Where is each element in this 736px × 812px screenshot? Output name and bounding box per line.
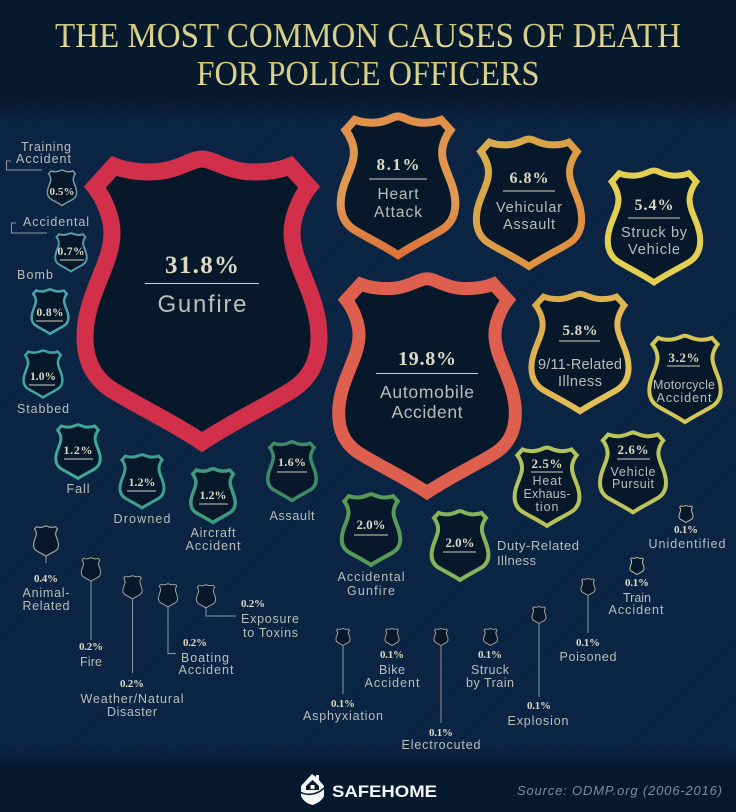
shield: struck by vehicle 5.4%: 5.4% (634, 197, 674, 214)
shield: exposure to toxins 0.2%: Exposure (241, 612, 299, 626)
shield: heart attack 8.1%: Attack (374, 204, 422, 221)
shield: stabbed 1.0%: 1.0% (30, 371, 56, 383)
shield: accidental gunfire 2.0% (338, 494, 404, 598)
shield: exposure to toxins 0.2%: to Toxins (243, 626, 298, 640)
shield: animal-related 0.4% (22, 526, 70, 613)
logo: SafeHome (300, 774, 437, 805)
shield: weather/natural disaster 0.2%: 0.2% (120, 678, 144, 690)
shield: explosion 0.1%: Explosion (508, 714, 569, 728)
shield: drowned 1.2%: 1.2% (128, 475, 156, 489)
shield: heart attack 8.1%: Heart (378, 186, 419, 203)
shield: vehicle pursuit 2.6%: Vehicle (610, 465, 656, 479)
shield: asphyxiation 0.1%: 0.1% (331, 698, 355, 710)
shield: training accident 0.5% (6, 140, 77, 206)
shield: asphyxiation 0.1%: Asphyxiation (303, 709, 383, 723)
shield: exposure to toxins 0.2% (196, 585, 299, 640)
shield: assault 1.6% (268, 442, 316, 523)
shield: animal-related 0.4%: Animal- (22, 586, 70, 600)
shield: train accident 0.1%: Train (623, 591, 651, 605)
shield: explosion 0.1% (508, 607, 569, 728)
shield: gunfire 31.8%: 31.8% (165, 252, 239, 279)
shield: unidentified 0.1%: Unidentified (648, 537, 726, 551)
shield: fire 0.2%: Fire (80, 655, 102, 669)
shield: aircraft accident 1.2% (186, 469, 241, 553)
shield: poisoned 0.1%: 0.1% (576, 637, 600, 649)
shield: exposure to toxins 0.2%: 0.2% (241, 598, 265, 610)
shield: heat exhaustion 2.5%: tion (536, 500, 559, 514)
shield: accidental 0.7% (12, 215, 89, 271)
shield: fire 0.2% (79, 558, 103, 669)
shield: explosion 0.1%: 0.1% (527, 700, 551, 712)
shield: bike accident 0.1% (364, 629, 420, 690)
shield: 9/11-related illness 5.8% (531, 294, 629, 411)
shield: vehicular assault 6.8%: Assault (503, 217, 555, 233)
shield: heat exhaustion 2.5%: Heat (532, 474, 562, 488)
shield: struck by train 0.1%: by Train (466, 676, 514, 690)
shield: stabbed 1.0% (17, 350, 69, 416)
shield: accidental gunfire 2.0%: Accidental (338, 570, 404, 584)
shield: poisoned 0.1% (560, 579, 617, 664)
shield: heat exhaustion 2.5%: 2.5% (532, 456, 562, 471)
shield: bike accident 0.1%: Bike (379, 663, 405, 677)
shield: accidental 0.7%: Accidental (23, 215, 89, 229)
shield: vehicular assault 6.8%: Vehicular (496, 200, 562, 216)
shield: motorcycle accident 3.2%: Motorcycle (653, 378, 715, 392)
shield: boating accident 0.2%: Accident (178, 663, 234, 677)
shield: struck by train 0.1%: Struck (471, 663, 510, 677)
shield: training accident 0.5%: Training (21, 140, 71, 154)
shield: weather/natural disaster 0.2%: Disaster (107, 705, 157, 719)
shield: weather/natural disaster 0.2%: Weather/Natural (80, 692, 184, 706)
shield: bomb 0.8%: 0.8% (36, 307, 64, 319)
shield: assault 1.6%: 1.6% (278, 455, 306, 469)
shield: drowned 1.2%: Drowned (114, 512, 171, 526)
shield: unidentified 0.1%: 0.1% (674, 524, 698, 536)
shield: duty-related illness 2.0% (432, 511, 579, 580)
shield: struck by vehicle 5.4% (608, 171, 700, 282)
shield: fire 0.2%: 0.2% (79, 641, 103, 653)
shield: boating accident 0.2% (158, 584, 234, 677)
shield: unidentified 0.1% (648, 506, 726, 551)
shield: animal-related 0.4%: Related (22, 599, 70, 613)
shield: bomb 0.8%: Bomb (17, 268, 53, 282)
shield: training accident 0.5%: Accident (16, 152, 72, 166)
shield: electrocuted 0.1%: 0.1% (429, 727, 453, 739)
shield: automobile accident 19.8%: Accident (392, 402, 463, 422)
shield: bike accident 0.1%: Accident (364, 676, 420, 690)
shield: poisoned 0.1%: Poisoned (560, 650, 617, 664)
shield: gunfire 31.8%: Gunfire (158, 291, 246, 318)
shield: vehicle pursuit 2.6% (600, 433, 666, 512)
shield: automobile accident 19.8%: Automobile (380, 382, 474, 402)
shield: electrocuted 0.1%: Electrocuted (402, 738, 481, 752)
shield: asphyxiation 0.1% (303, 629, 383, 723)
shield: aircraft accident 1.2%: Accident (186, 539, 241, 553)
shield: heart attack 8.1%: 8.1% (376, 155, 420, 174)
header band (0, 0, 736, 100)
shield: fall 1.2% (56, 425, 100, 496)
shield: bike accident 0.1%: 0.1% (380, 649, 404, 661)
shield: motorcycle accident 3.2%: 3.2% (668, 350, 700, 365)
shield: struck by vehicle 5.4%: Struck by (621, 225, 688, 241)
shield: boating accident 0.2%: Boating (181, 651, 229, 665)
shield: accidental gunfire 2.0%: 2.0% (356, 517, 386, 532)
shield: heart attack 8.1% (341, 116, 455, 255)
shield: 9/11-related illness 5.8%: 9/11-Related (538, 357, 622, 373)
shield: train accident 0.1%: Accident (608, 603, 664, 617)
shield: 9/11-related illness 5.8%: Illness (558, 374, 602, 390)
source note: Source: ODMP.org (2006-2016) (517, 783, 722, 798)
shield: stabbed 1.0%: Stabbed (17, 402, 69, 416)
shield: fall 1.2%: Fall (66, 482, 90, 496)
shield: boating accident 0.2%: 0.2% (183, 637, 207, 649)
shield: aircraft accident 1.2%: 1.2% (200, 488, 226, 502)
shield: weather/natural disaster 0.2% (80, 576, 184, 719)
shield: train accident 0.1% (608, 558, 664, 617)
shield: 9/11-related illness 5.8%: 5.8% (562, 323, 598, 339)
shield: struck by train 0.1%: 0.1% (478, 649, 502, 661)
shield: automobile accident 19.8% (339, 279, 515, 492)
title: THE MOST COMMON CAUSES OF DEATH (55, 16, 681, 55)
title (55, 16, 681, 93)
shield: struck by vehicle 5.4%: Vehicle (628, 242, 680, 258)
shield: assault 1.6%: Assault (270, 509, 315, 523)
shield: vehicle pursuit 2.6%: 2.6% (618, 442, 648, 457)
shield: electrocuted 0.1% (402, 629, 481, 752)
title: FOR POLICE OFFICERS (196, 54, 540, 93)
shield: accidental 0.7%: 0.7% (58, 246, 84, 258)
shield: bomb 0.8% (17, 268, 68, 334)
shield: animal-related 0.4%: 0.4% (34, 573, 58, 585)
shield: accidental gunfire 2.0%: Gunfire (347, 584, 395, 598)
shield: gunfire 31.8% (85, 159, 319, 442)
shield: heat exhaustion 2.5% (515, 447, 579, 526)
footer band (0, 765, 736, 812)
shield: struck by train 0.1% (466, 629, 514, 690)
shield: training accident 0.5%: 0.5% (50, 186, 74, 198)
shield: automobile accident 19.8%: 19.8% (398, 348, 456, 370)
shield: motorcycle accident 3.2%: Accident (656, 391, 712, 405)
shield: duty-related illness 2.0%: 2.0% (446, 535, 474, 550)
shield: vehicular assault 6.8% (476, 139, 582, 266)
shield: duty-related illness 2.0%: Illness (497, 553, 536, 568)
shield: vehicle pursuit 2.6%: Pursuit (612, 477, 655, 491)
shield: heat exhaustion 2.5%: Exhaus- (524, 487, 570, 501)
shield: train accident 0.1%: 0.1% (625, 577, 649, 589)
logo: SafeHome: SAFEHOME (332, 782, 437, 801)
shield: fall 1.2%: 1.2% (64, 443, 92, 457)
shield: aircraft accident 1.2%: Aircraft (190, 526, 236, 540)
shield: motorcycle accident 3.2% (649, 336, 721, 422)
shield: duty-related illness 2.0%: Duty-Related (497, 538, 579, 553)
shield: drowned 1.2% (114, 455, 171, 526)
shield: vehicular assault 6.8%: 6.8% (510, 170, 548, 187)
